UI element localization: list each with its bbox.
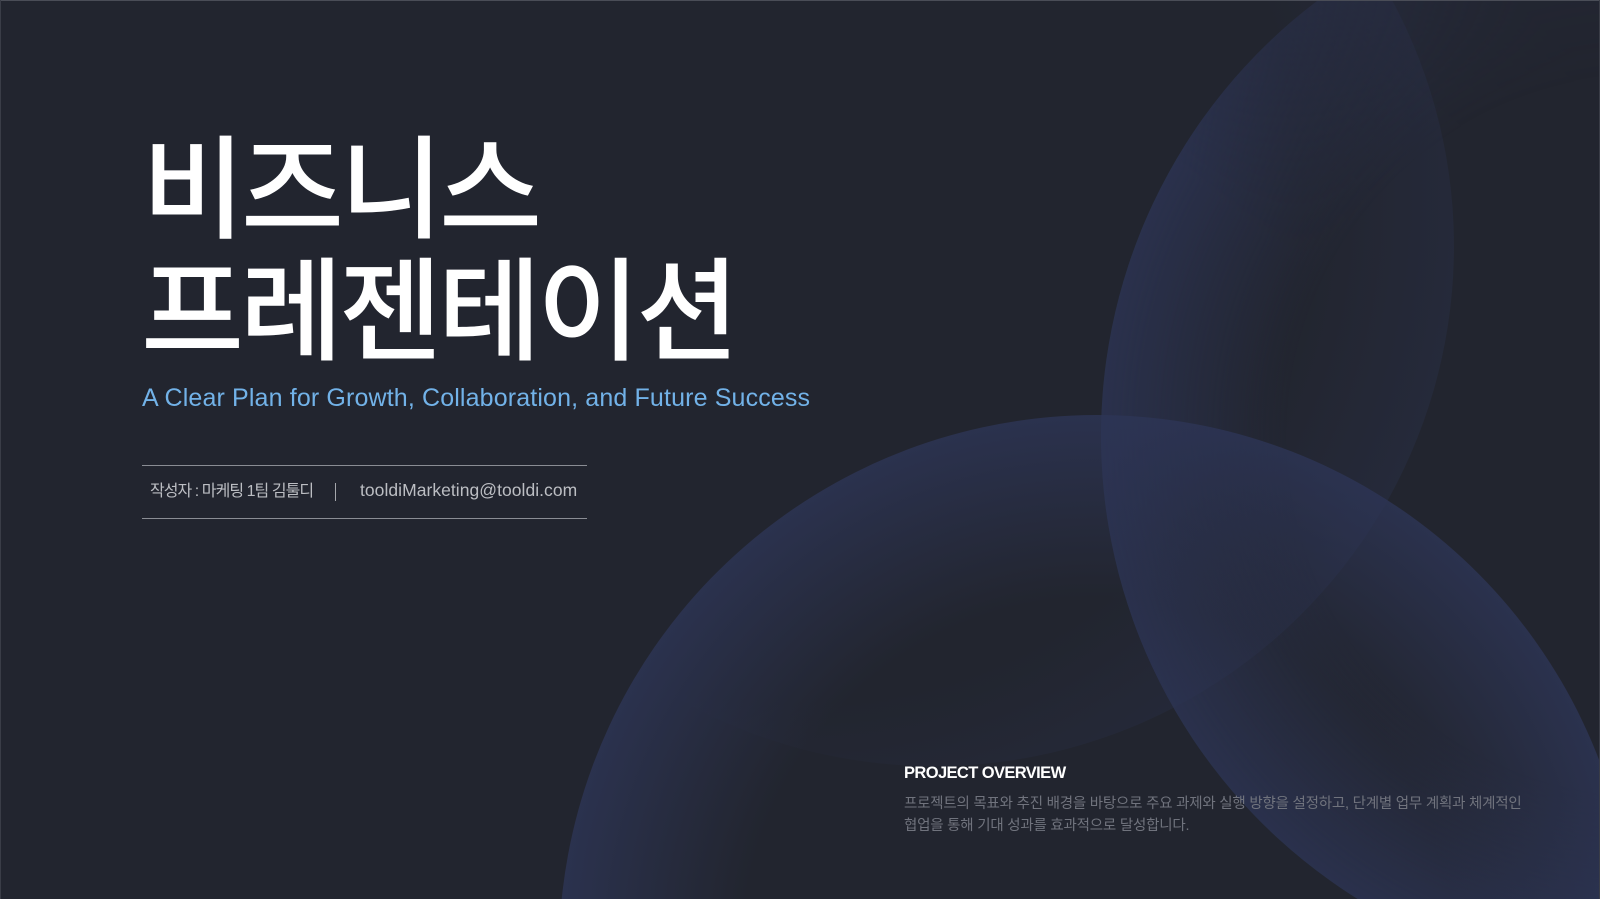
overview body: [904, 795, 1521, 834]
email: tooldiMarketing@tooldi.com: [360, 480, 577, 500]
author: 작성자 : 마케팅 1팀 김툴디: [150, 483, 313, 500]
project overview: [904, 764, 1521, 834]
right edge line: [1599, 0, 1600, 899]
overview body: 협업을 통해 기대 성과를 효과적으로 달성합니다.: [904, 818, 1189, 834]
circle: lower centre: [562, 415, 1600, 899]
top edge line: [0, 0, 1600, 1]
circle: upper right: [1101, 0, 1600, 899]
author block: [142, 465, 587, 519]
background circles: [562, 1, 1599, 899]
overview heading: PROJECT OVERVIEW: [904, 764, 1066, 782]
overview body: 프로젝트의 목표와 추진 배경을 바탕으로 주요 과제와 실행 방향을 설정하고, 단계별 업무 계획과 체계적인: [904, 796, 1521, 812]
left edge line: [0, 0, 1, 899]
title line 1: 비즈니스: [142, 128, 538, 253]
title line 2: 프레젠테이션: [141, 250, 735, 375]
circle: faint back circle: [414, 0, 1454, 766]
separator: [335, 483, 336, 501]
subtitle: A Clear Plan for Growth, Collaboration, and Future Success: [142, 384, 810, 412]
